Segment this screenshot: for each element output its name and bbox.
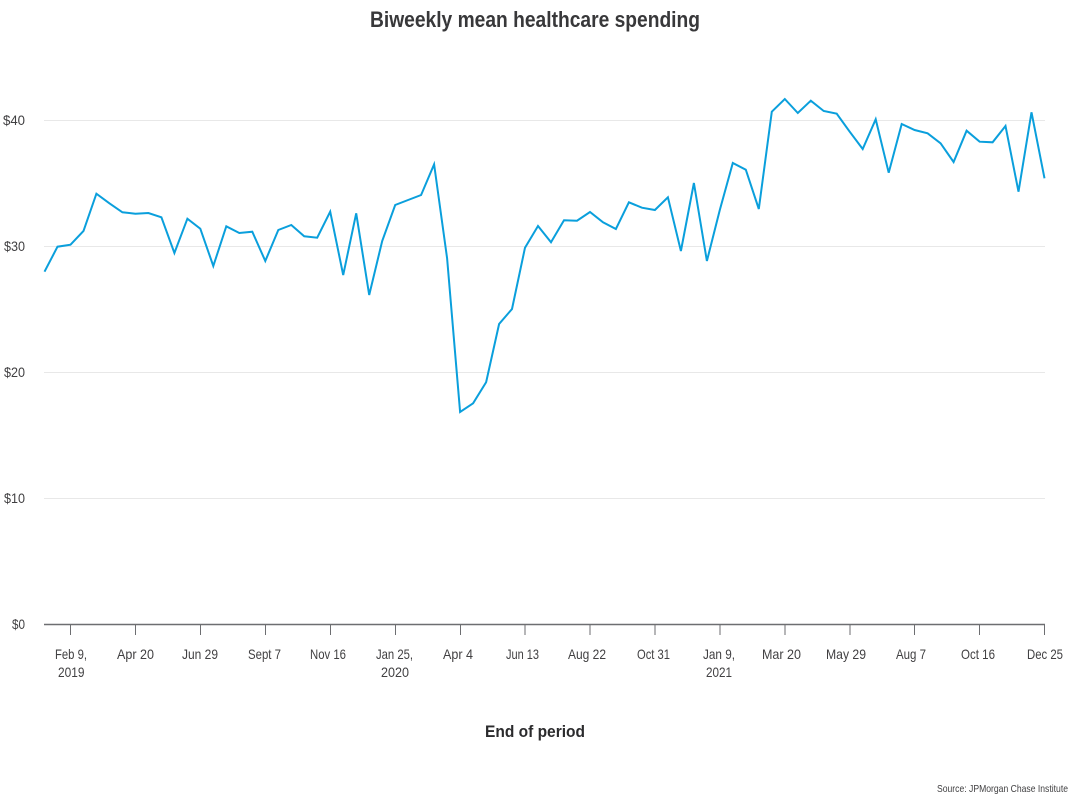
x-axis labels: Sept 7 bbox=[248, 646, 281, 662]
x-axis labels: Feb 9, bbox=[55, 646, 87, 662]
title: Biweekly mean healthcare spending bbox=[370, 7, 700, 32]
y-axis labels: $30 bbox=[4, 238, 25, 254]
y-axis labels: $40 bbox=[3, 112, 25, 128]
x-axis labels: May 29 bbox=[826, 646, 866, 662]
x-axis labels: 2021 bbox=[706, 664, 732, 680]
y-axis labels: $0 bbox=[12, 616, 25, 632]
x-axis labels: 2020 bbox=[381, 664, 409, 680]
x-axis labels: Aug 22 bbox=[568, 646, 606, 662]
y-axis labels bbox=[3, 112, 25, 632]
x-axis labels: Apr 20 bbox=[117, 646, 154, 662]
gridlines bbox=[44, 120, 1045, 498]
x-axis labels: Jun 13 bbox=[506, 646, 539, 662]
x-axis labels: Nov 16 bbox=[310, 646, 346, 662]
x-axis line and ticks bbox=[44, 624, 1045, 635]
x-axis labels: Oct 16 bbox=[961, 646, 995, 662]
x-axis labels: Apr 4 bbox=[443, 646, 473, 662]
y-axis labels: $20 bbox=[4, 364, 25, 380]
x-axis labels: Oct 31 bbox=[637, 646, 670, 662]
x-axis labels: Mar 20 bbox=[762, 646, 801, 662]
x-axis labels bbox=[55, 646, 1063, 680]
x-axis labels: Jan 25, bbox=[376, 646, 413, 662]
x-axis title: End of period bbox=[485, 722, 585, 741]
line series: biweekly mean healthcare spending bbox=[44, 99, 1044, 412]
x-axis labels: Jan 9, bbox=[703, 646, 735, 662]
x-axis labels: Jun 29 bbox=[182, 646, 218, 662]
x-axis labels: Aug 7 bbox=[896, 646, 926, 662]
x-axis labels: 2019 bbox=[58, 664, 85, 680]
y-axis labels: $10 bbox=[4, 490, 25, 506]
